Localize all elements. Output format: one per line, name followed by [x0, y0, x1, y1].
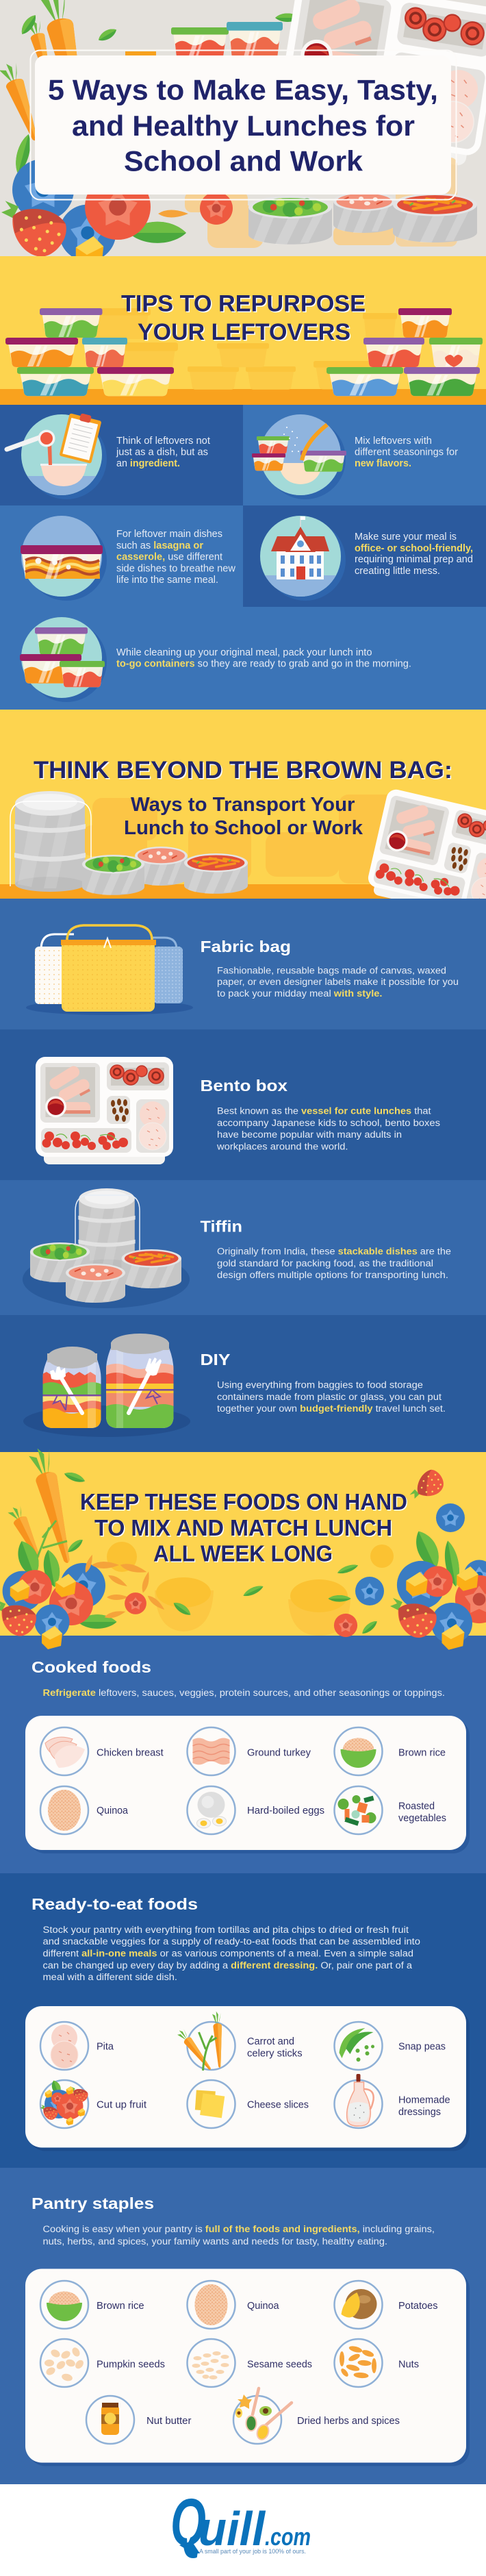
icon: faded tiffins — [185, 158, 457, 248]
subheading: ways to transport — [124, 794, 363, 839]
item: quinoa — [40, 1786, 129, 1834]
text: cooked foods intro: Refrigerate leftovers, sauces, veggies, protein sources, and other seasonings or toppings. — [42, 1688, 445, 1699]
icon: mason jars — [23, 1334, 190, 1437]
icon: bento tray — [36, 1057, 173, 1164]
item: cheese slices — [188, 2080, 309, 2128]
icon: tiffin stack — [10, 791, 91, 892]
panel: tip 5 to-go containers — [0, 607, 486, 710]
panel: tip 4 office friendly — [243, 505, 486, 607]
icon: to-go containers — [20, 617, 107, 702]
heading: ready-to-eat foods: Ready-to-eat foods — [31, 1895, 198, 1913]
item: cut up fruit — [40, 2079, 146, 2128]
item: quinoa — [188, 2281, 280, 2329]
heading: fabric bag: Fabric bag — [200, 938, 291, 955]
text: ready-to-eat intro — [42, 1925, 420, 1983]
text: fabric bag: Fashionable, reusable bags made of canvas, waxed — [217, 966, 446, 977]
logo: Quill.com — [170, 2485, 311, 2560]
subheading: ways to transport: Lunch to School or Work — [124, 817, 363, 839]
heading: tips to repurpose: TIPS TO REPURPOSE — [121, 290, 366, 316]
item: quinoa: Quinoa — [247, 2301, 280, 2312]
heading: DIY: DIY — [200, 1351, 231, 1368]
item: sesame seeds — [188, 2339, 312, 2387]
item: hard-boiled eggs: Hard-boiled eggs — [247, 1805, 324, 1816]
item: pita: Pita — [97, 2042, 114, 2053]
panel: tip 2 new flavors — [243, 405, 486, 505]
icon: tilted bento tray — [368, 789, 486, 899]
item: homemade dressings: Homemade — [398, 2094, 450, 2105]
item: pita — [40, 2022, 114, 2070]
panel: tips header — [0, 256, 486, 405]
item: roasted vegetables: Roasted — [398, 1801, 435, 1812]
item: nut butter — [86, 2396, 192, 2444]
text: fabric bag — [217, 966, 459, 999]
icon: tiffin set — [23, 1188, 190, 1308]
panel: title card — [30, 51, 456, 200]
text: tip 4: Make sure your meal is — [355, 532, 457, 542]
card: ready-to-eat foods — [25, 2006, 470, 2151]
card: pantry staples — [25, 2268, 470, 2466]
item: hard-boiled eggs — [188, 1786, 324, 1834]
right containers — [327, 308, 483, 396]
item: nut butter: Nut butter — [146, 2416, 192, 2427]
right food cluster — [390, 1465, 486, 1650]
panel: pantry staples — [0, 2168, 486, 2484]
heading: cooked foods: Cooked foods — [31, 1658, 151, 1676]
text: tip 3: casserole, use different — [116, 552, 222, 563]
card: cooked foods — [25, 1716, 470, 1853]
title: and Healthy Lunches for — [72, 110, 415, 142]
item: pumpkin seeds — [40, 2339, 165, 2387]
heading: keep these foods — [80, 1490, 407, 1567]
item: chicken breast: Chicken breast — [97, 1748, 164, 1759]
icon: mixing containers — [252, 414, 346, 499]
text: bento box: accompany Japanese kids to school, bento boxes — [217, 1118, 440, 1129]
item: pumpkin seeds: Pumpkin seeds — [97, 2360, 165, 2371]
item: brown rice: Brown rice — [97, 2301, 144, 2312]
text: bento box: workplaces around the world. — [216, 1141, 348, 1152]
left food cluster — [0, 1445, 116, 1649]
heading: bento box: Bento box — [200, 1077, 287, 1095]
heading: tiffin: Tiffin — [200, 1218, 242, 1236]
faded containers — [89, 308, 397, 390]
panel: DIY — [0, 1315, 486, 1452]
text: DIY — [217, 1380, 446, 1414]
text: tip 2: new flavors. — [355, 458, 411, 469]
faded bowls — [107, 1542, 394, 1636]
text: tip 4: creating little mess. — [355, 566, 440, 577]
text: DIY: Using everything from baggies to food storage — [217, 1380, 423, 1391]
panel: tip 3 side dishes — [0, 505, 243, 607]
text: bento box: have become popular with many adults in — [217, 1129, 402, 1140]
icon: top containers — [125, 22, 283, 59]
text: bento box — [216, 1105, 440, 1152]
item: snap peas: Snap peas — [398, 2042, 446, 2053]
panel: transport header — [0, 710, 486, 899]
text: DIY: together your own budget-friendly travel lunch set. — [217, 1403, 446, 1414]
text: tip 2 — [355, 436, 458, 469]
icon: lasagna container — [21, 516, 107, 601]
item: potatoes: Potatoes — [398, 2301, 438, 2312]
subheading: ways to transport: Ways to Transport Your — [131, 794, 355, 816]
heading: tips to repurpose: YOUR LEFTOVERS — [138, 319, 350, 345]
title — [48, 74, 438, 177]
item: dried herbs and spices: Dried herbs and spices — [297, 2416, 400, 2427]
icon: bento tray — [273, 0, 486, 168]
item: carrot and celery sticks — [176, 2011, 303, 2073]
left containers — [5, 308, 174, 396]
text: tip 2: different seasonings for — [355, 447, 458, 458]
text: tip 1: an ingredient. — [116, 458, 180, 469]
text: tiffin: Originally from India, these stackable dishes are the — [217, 1247, 451, 1258]
panel: ready-to-eat foods — [0, 1873, 486, 2168]
text: pantry intro: Cooking is easy when your pantry is full of the foods and ingredients, including grains, — [42, 2224, 435, 2235]
item: homemade dressings — [334, 2074, 450, 2128]
heading: think beyond: THINK BEYOND THE BROWN BAG: — [34, 756, 452, 784]
title: 5 Ways to Make Easy, Tasty, — [48, 74, 438, 105]
item: carrot and celery sticks: celery sticks — [247, 2048, 303, 2059]
icon: carrots and leaves — [0, 0, 300, 175]
text: tiffin: gold standard for packing food, as the traditional — [217, 1258, 433, 1269]
item: ground turkey: Ground turkey — [247, 1748, 311, 1759]
item: roasted vegetables: vegetables — [398, 1813, 446, 1824]
icon: spoon bowl clipboard — [7, 410, 107, 499]
hero illustration — [0, 0, 486, 268]
heading: keep these foods: KEEP THESE FOODS ON HAND — [80, 1490, 407, 1515]
text: pantry intro: nuts, herbs, and spices, your family wants and needs for tasty, healthy eating. — [42, 2236, 387, 2247]
logo: Quill.com: uill — [199, 2502, 266, 2555]
text: tip 2: Mix leftovers with — [355, 436, 432, 447]
panel: cooked foods background — [0, 1636, 486, 1873]
text: tip 4: office- or school-friendly, — [355, 543, 473, 554]
item: brown rice — [334, 1727, 446, 1775]
footer background — [0, 2484, 486, 2576]
logo tagline: A small part of your job is 100% of ours. — [199, 2548, 306, 2555]
item: cut up fruit: Cut up fruit — [97, 2100, 146, 2111]
text: pantry intro — [42, 2224, 435, 2247]
icon: school building — [259, 516, 346, 601]
panel: keep foods header — [0, 1445, 486, 1650]
item: roasted vegetables — [334, 1786, 446, 1834]
item: brown rice — [40, 2281, 144, 2329]
text: tip 3: For leftover main dishes — [116, 529, 222, 540]
panel: hero banner background — [0, 0, 486, 256]
text: fabric bag: to pack your midday meal with style. — [217, 988, 382, 999]
panel: fabric bag — [0, 899, 486, 1029]
heading: keep these foods: TO MIX AND MATCH LUNCH — [94, 1516, 392, 1541]
item: cheese slices: Cheese slices — [247, 2100, 309, 2111]
heading: tips to repurpose — [121, 290, 366, 345]
text: tip 4: requiring minimal prep and — [355, 554, 473, 565]
text: ready-to-eat intro: different all-in-one meals or as various components of a meal. Even a simple salad — [42, 1949, 413, 1960]
text: fabric bag: paper, or even designer labels make it possible for you — [217, 977, 459, 988]
text: tip 3: side dishes to breathe new — [116, 563, 235, 574]
text: ready-to-eat intro: meal with a different side dish. — [42, 1972, 177, 1983]
item: carrot and celery sticks: Carrot and — [247, 2036, 294, 2047]
text: ready-to-eat intro: and snackable veggies for a supply of ready-to-eat foods that can be assembled into — [42, 1936, 420, 1947]
item: nuts: Nuts — [398, 2360, 419, 2371]
item: sesame seeds: Sesame seeds — [247, 2360, 312, 2371]
text: ready-to-eat intro: can be changed up every day by adding a different dressing. Or, pair one part of a — [42, 1960, 412, 1971]
panel: tiffin — [0, 1180, 486, 1315]
text: tiffin — [217, 1247, 451, 1281]
item: homemade dressings: dressings — [398, 2107, 441, 2118]
text: tip 4 — [355, 532, 473, 577]
item: quinoa: Quinoa — [97, 1805, 129, 1816]
text: bento box: Best known as the vessel for cute lunches that — [217, 1105, 431, 1116]
icon: hero fruit cluster — [1, 160, 233, 256]
logo: Quill.com: Q — [170, 2485, 206, 2560]
item: snap peas — [334, 2022, 446, 2070]
panel: tip 1 ingredient — [0, 405, 243, 505]
heading: pantry staples: Pantry staples — [31, 2194, 154, 2212]
faded tiffins — [82, 795, 400, 884]
item: dried herbs and spices — [233, 2388, 400, 2444]
icon: open bowls — [82, 847, 248, 895]
logo: Quill.com: .com — [265, 2523, 311, 2551]
text: tip 5 — [116, 647, 411, 670]
text: tip 3: life into the same meal. — [116, 575, 218, 586]
item: chicken breast — [40, 1727, 164, 1775]
item: nuts — [334, 2339, 419, 2387]
item: ground turkey — [188, 1727, 311, 1775]
text: tip 1 — [116, 436, 210, 469]
icon: fabric bags — [26, 925, 193, 1015]
text: tip 3 — [116, 529, 235, 586]
text: tip 5: While cleaning up your original meal, pack your lunch into — [116, 647, 372, 658]
heading: keep these foods: ALL WEEK LONG — [153, 1541, 333, 1567]
text: tip 5: to-go containers so they are ready to grab and go in the morning. — [116, 659, 411, 670]
text: DIY: containers made from plastic or glass, you can put — [217, 1392, 442, 1403]
title: School and Work — [124, 145, 363, 177]
text: tip 3: such as lasagna or — [116, 540, 203, 551]
text: ready-to-eat intro: Stock your pantry with everything from tortillas and pita chips to dried or fresh fruit — [42, 1925, 409, 1936]
item: brown rice: Brown rice — [398, 1748, 446, 1759]
text: tiffin: design offers multiple options for transporting lunch. — [217, 1270, 448, 1281]
icon: tiffin bowls — [248, 192, 477, 245]
panel: bento box — [0, 1029, 486, 1180]
item: potatoes — [334, 2281, 438, 2329]
icon: scattered almonds and leaves — [84, 1554, 384, 1637]
text: tip 1: just as a dish, but as — [116, 447, 208, 458]
text: tip 1: Think of leftovers not — [116, 436, 210, 447]
